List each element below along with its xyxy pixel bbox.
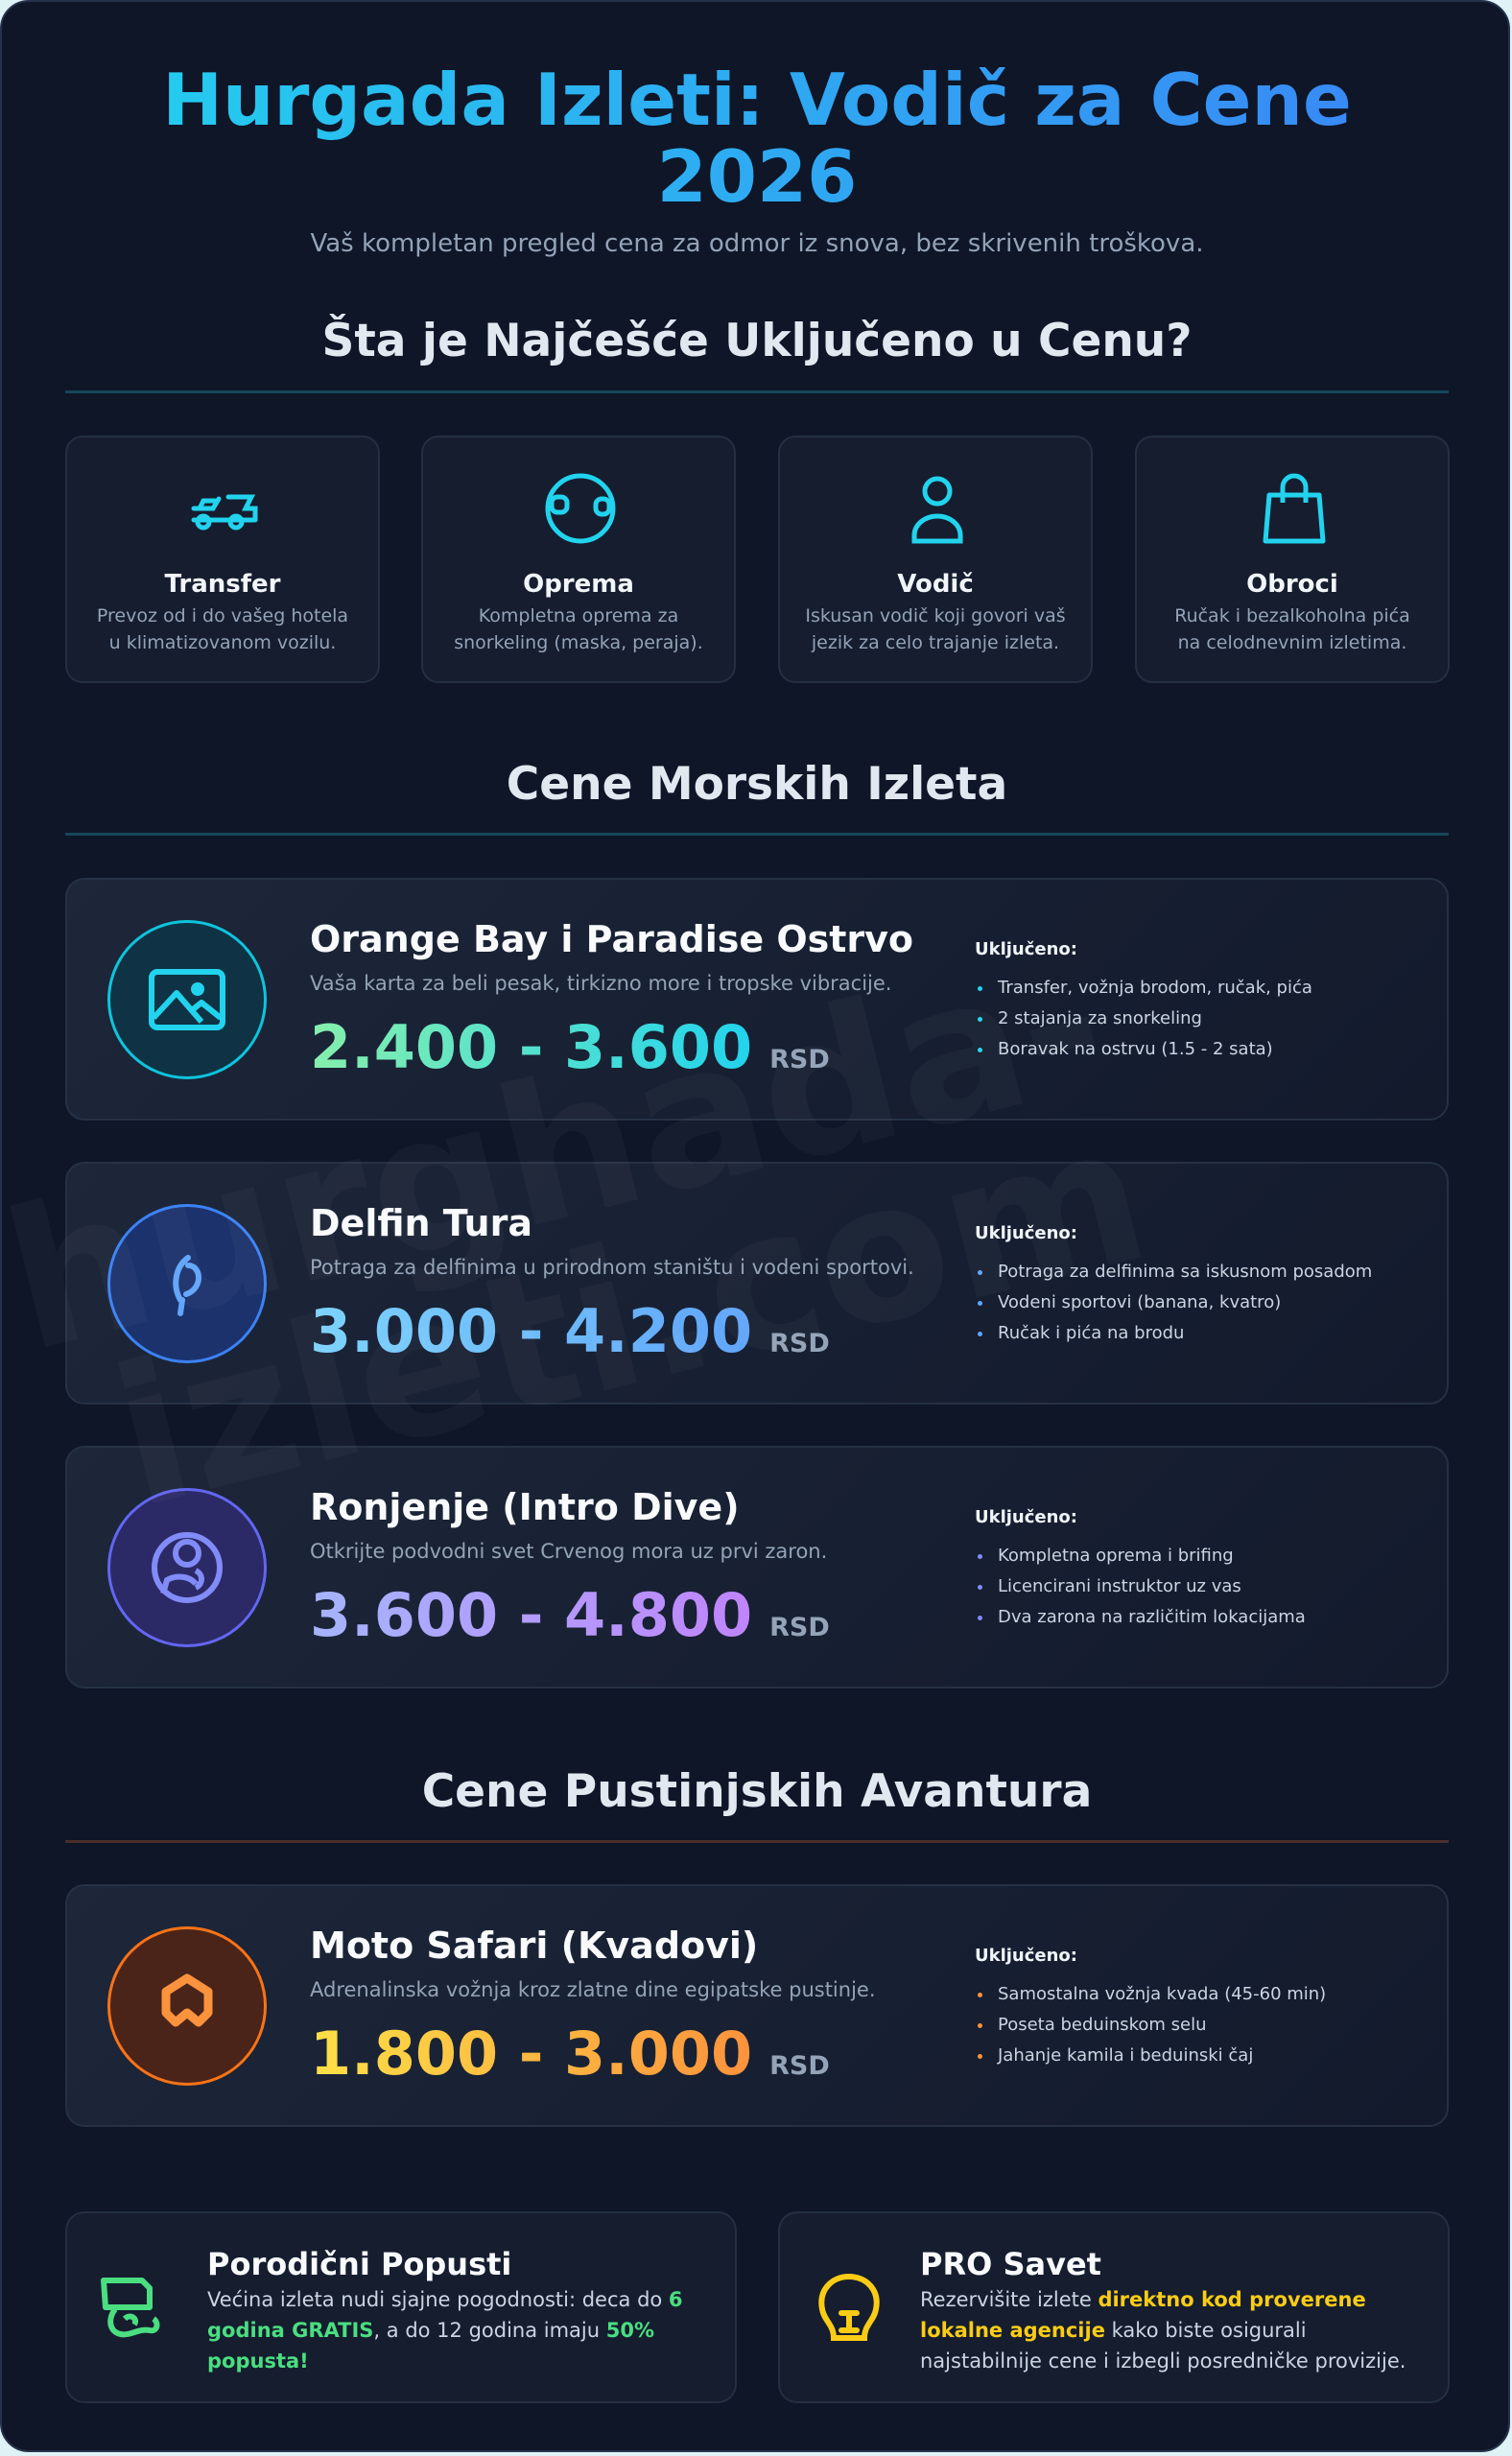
card: Ronjenje: Otkrijte podvodni svet Crvenog mora uz prvi zaron. [310,1540,827,1563]
included list [975,1223,1372,1343]
icon: dolphin [107,1204,267,1363]
card: Ronjenje [65,1446,1449,1688]
card: Orange Bay: Orange Bay i Paradise Ostrvo [310,918,913,960]
card: Moto Safari [65,1884,1449,2127]
card: family discounts: Porodični Popusti [207,2246,511,2282]
included list: Uključeno: [975,939,1077,959]
heading: desert: Cene Pustinjskih Avantura [422,1765,1092,1818]
icon: vehicle [192,495,257,530]
price: 2.400 - 3.600 RSD [310,1012,830,1082]
included list: Uključeno: [975,1946,1077,1966]
included list: Vodeni sportovi (banana, kvatro) [998,1292,1281,1312]
included list: Uključeno: [975,1223,1077,1243]
included list: 2 stajanja za snorkeling [998,1008,1202,1028]
icon: image [107,920,267,1079]
card: Obroci: Ručak i bezalkoholna pića [1174,605,1410,626]
icon: bag [1263,474,1326,543]
included list: Potraga za delfinima sa iskusnom posadom [998,1262,1372,1282]
icon: quad [107,1926,267,2086]
title: 2026 [657,134,857,219]
card: Delfin: Delfin Tura [310,1202,532,1244]
icon: person [911,476,963,543]
price: 3.600 - 4.800 RSD [310,1580,830,1650]
icon: mask [545,474,616,543]
card: Ronjenje: Ronjenje (Intro Dive) [310,1486,740,1528]
subtitle: Vaš kompletan pregled cena za odmor iz snova, bez skrivenih troškova. [310,229,1204,258]
icon: family [101,2278,159,2337]
card: pro tip [778,2211,1450,2403]
included list: Uključeno: [975,1507,1077,1527]
card: Obroci: Obroci [1246,570,1338,599]
card: Obroci [1135,436,1450,683]
card: Delfin [65,1162,1449,1405]
title [2,61,1512,215]
heading: included: Šta je Najčešće Uključeno u Cenu? [321,315,1193,367]
card: pro tip: PRO Savet [920,2246,1101,2282]
card: Vodic [778,436,1093,683]
included list: Boravak na ostrvu (1.5 - 2 sata) [998,1039,1273,1059]
icon: bulb [818,2274,880,2341]
card: Obroci: na celodnevnim izletima. [1178,632,1406,653]
included list: Licencirani instruktor uz vas [998,1576,1241,1596]
card: Moto Safari: Adrenalinska vožnja kroz zlatne dine egipatske pustinje. [310,1978,876,2001]
card: Vodic: jezik za celo trajanje izleta. [812,632,1059,653]
watermark: izleti.com [95,1081,1167,1551]
included list: Transfer, vožnja brodom, ručak, pića [998,978,1312,998]
price: 1.800 - 3.000 RSD [310,2019,830,2089]
included list [975,939,1312,1059]
included list [975,1507,1306,1627]
icon: diver [107,1488,267,1647]
card: Vodic: Iskusan vodič koji govori vaš [805,605,1066,626]
card: Moto Safari: Moto Safari (Kvadovi) [310,1925,758,1967]
card: pro tip: Rezervišite izlete direktno kod proverene lokalne agencije kako biste osigurali najstabilnije cene i izbegli posredničke provizije. [920,2288,1406,2373]
card: family discounts [65,2211,737,2403]
card: Vodic: Vodič [897,570,974,599]
card: Transfer: Prevoz od i do vašeg hotela u klimatizovanom vozilu. [97,605,348,653]
card: Transfer [65,436,380,683]
included list: Ručak i pića na brodu [998,1323,1184,1343]
card: Orange Bay [65,878,1449,1121]
included list: Poseta beduinskom selu [998,2015,1207,2035]
included list: Samostalna vožnja kvada (45-60 min) [998,1984,1326,2004]
card: Orange Bay: Vaša karta za beli pesak, tirkizno more i tropske vibracije. [310,972,891,995]
heading: sea: Cene Morskih Izleta [507,758,1007,811]
watermark: hurghada- [0,909,1125,1396]
card: Delfin: Potraga za delfinima u prirodnom staništu i vodeni sportovi. [310,1256,914,1279]
included list: Kompletna oprema i brifing [998,1546,1234,1566]
included list [975,1946,1326,2066]
card: Oprema [421,436,736,683]
card: Oprema: Kompletna oprema za snorkeling (maska, peraja). [454,605,703,653]
price: 3.000 - 4.200 RSD [310,1296,830,1366]
included list: Jahanje kamila i beduinski čaj [998,2045,1253,2066]
card: family discounts: Većina izleta nudi sjajne pogodnosti: deca do 6 godina GRATIS, a do 12 godina imaju 50% popusta! [207,2288,683,2373]
card: Oprema: Oprema [523,570,634,599]
title: Hurgada Izleti: Vodič za Cene [162,58,1352,142]
included list: Dva zarona na različitim lokacijama [998,1607,1306,1627]
card: Transfer: Transfer [165,570,280,599]
